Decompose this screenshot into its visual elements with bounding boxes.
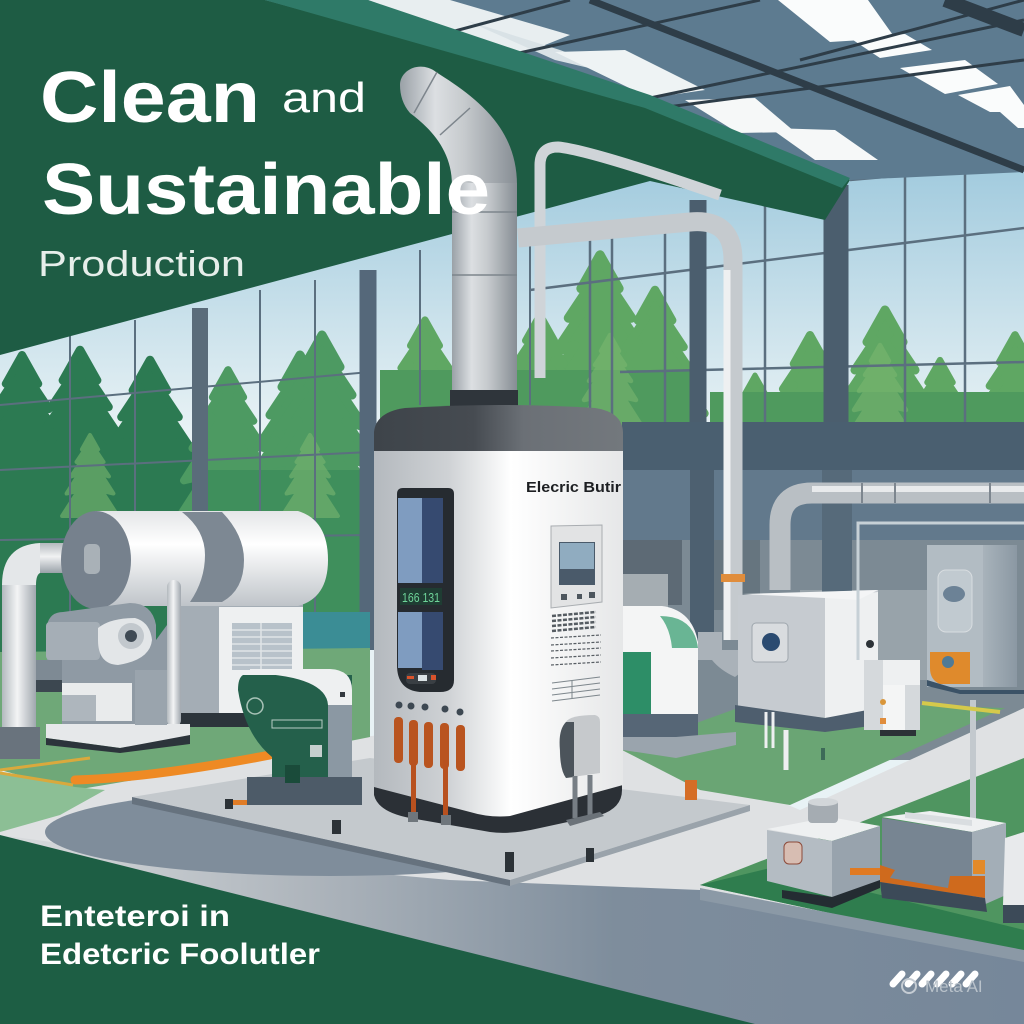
bottom caption: Enteteroi in <box>40 900 230 933</box>
right horizontal pipe <box>780 483 1024 590</box>
pipe vertical <box>2 585 36 730</box>
funnel duct <box>698 632 745 677</box>
teal roof edge <box>265 0 850 188</box>
boiler body <box>374 445 623 816</box>
orange cable on the lawn <box>75 755 270 780</box>
watermark logo: Meta AI <box>925 977 983 996</box>
grey boiler unit <box>735 590 878 732</box>
main electric boiler <box>374 405 623 833</box>
large process pipe <box>518 222 745 640</box>
title <box>38 58 490 284</box>
control panel <box>551 525 602 608</box>
dark base <box>180 713 300 727</box>
title: Sustainable <box>42 150 490 230</box>
posts on the lawn <box>766 712 823 770</box>
chimney flue <box>400 67 518 407</box>
floor shadow <box>45 788 615 876</box>
boiler platform <box>132 758 750 886</box>
pipe elbow <box>2 543 40 585</box>
display window: 166 131 <box>402 590 440 605</box>
green-topped unit <box>623 606 736 758</box>
spec tables <box>551 612 601 701</box>
cylinder band <box>182 512 244 602</box>
window mullions <box>0 165 1024 650</box>
title: and <box>282 74 366 121</box>
pipe base <box>0 727 40 759</box>
far right unit <box>1003 832 1024 923</box>
roof with skylights <box>265 0 1024 180</box>
gear unit body <box>47 603 180 727</box>
cylinder <box>95 511 328 606</box>
vertical pipe <box>167 580 181 727</box>
boiler cap <box>374 405 623 451</box>
junction box <box>560 715 604 826</box>
back wall below the windows <box>205 422 1024 760</box>
boiler base <box>374 770 622 833</box>
green control cabinet <box>238 669 362 805</box>
green title banner <box>0 0 850 355</box>
title: Clean <box>40 58 260 138</box>
bottom caption: Edetcric Foolutler <box>40 938 320 971</box>
white box front <box>219 607 303 715</box>
thin pipe frame <box>858 523 1024 660</box>
small foreground unit two <box>880 811 1006 912</box>
cylinder end cap <box>61 511 131 609</box>
tall signal pole <box>970 700 976 824</box>
watermark logo <box>893 974 983 996</box>
title: Production <box>38 243 245 284</box>
tall grey cabinet <box>927 545 1024 694</box>
unit base <box>46 670 190 753</box>
lawn edge stripe <box>922 703 1000 712</box>
box below cylinder <box>176 600 303 718</box>
boiler label: Elecric Butir <box>526 479 621 496</box>
heating elements <box>394 717 465 825</box>
left machine: pipe and cylinder <box>0 511 328 759</box>
louvre door <box>232 623 292 670</box>
small side unit <box>864 660 920 736</box>
small foreground unit one <box>767 798 880 908</box>
indicator dots <box>396 702 464 716</box>
thin process pipe <box>540 147 720 378</box>
pipe horizontal <box>40 543 95 573</box>
yellow floor lines <box>0 758 90 785</box>
gear unit <box>46 618 152 665</box>
ground <box>0 648 1024 1024</box>
bottom caption <box>40 900 320 971</box>
background: forest beyond the windows <box>0 255 1024 660</box>
display window <box>397 488 454 692</box>
pipe collar <box>84 544 100 574</box>
